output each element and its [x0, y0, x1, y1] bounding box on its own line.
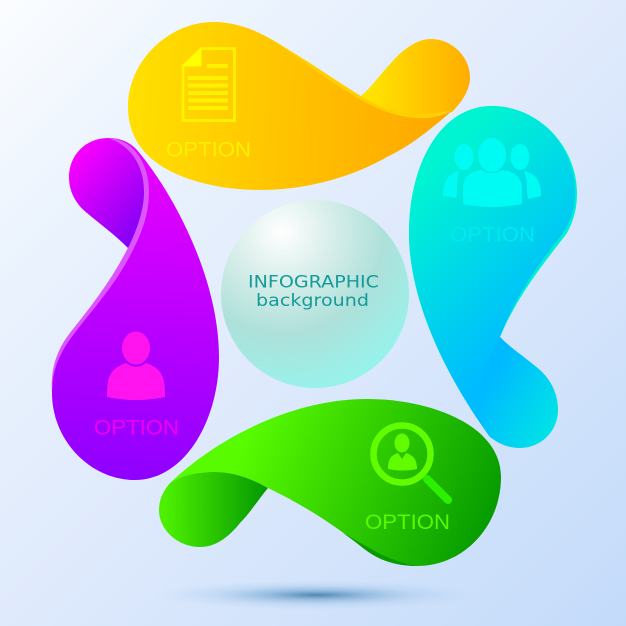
option label: OPTION [94, 416, 179, 440]
cyan body lip [409, 106, 577, 437]
purple body [52, 138, 219, 480]
green fold lip [343, 533, 417, 566]
panel: purple user option [52, 138, 219, 480]
green body [170, 399, 501, 566]
panel: yellow document option [128, 22, 470, 190]
option label: OPTION [450, 224, 535, 246]
cyan fold lobe [478, 337, 558, 448]
sphere [221, 200, 409, 388]
center sphere [221, 200, 409, 388]
panel: green search option [159, 399, 501, 566]
purple fold lobe [69, 138, 146, 248]
icon: user [107, 332, 165, 400]
title text: INFOGRAPHIC [248, 272, 379, 292]
panel: cyan team option [409, 106, 577, 448]
green fold lobe [159, 472, 268, 547]
cyan body [409, 106, 575, 437]
icon: team [443, 138, 541, 207]
yellow body [128, 22, 453, 190]
option label: OPTION [166, 138, 251, 162]
purple highlight stripe [52, 138, 149, 393]
option label: OPTION [365, 511, 450, 534]
yellow fold lobe [356, 39, 470, 122]
subtitle text: background [256, 291, 369, 311]
icon: magnifier with person [374, 426, 448, 500]
yellow fold lip [263, 35, 453, 118]
icon: document [182, 48, 234, 120]
ground shadow [157, 580, 477, 610]
